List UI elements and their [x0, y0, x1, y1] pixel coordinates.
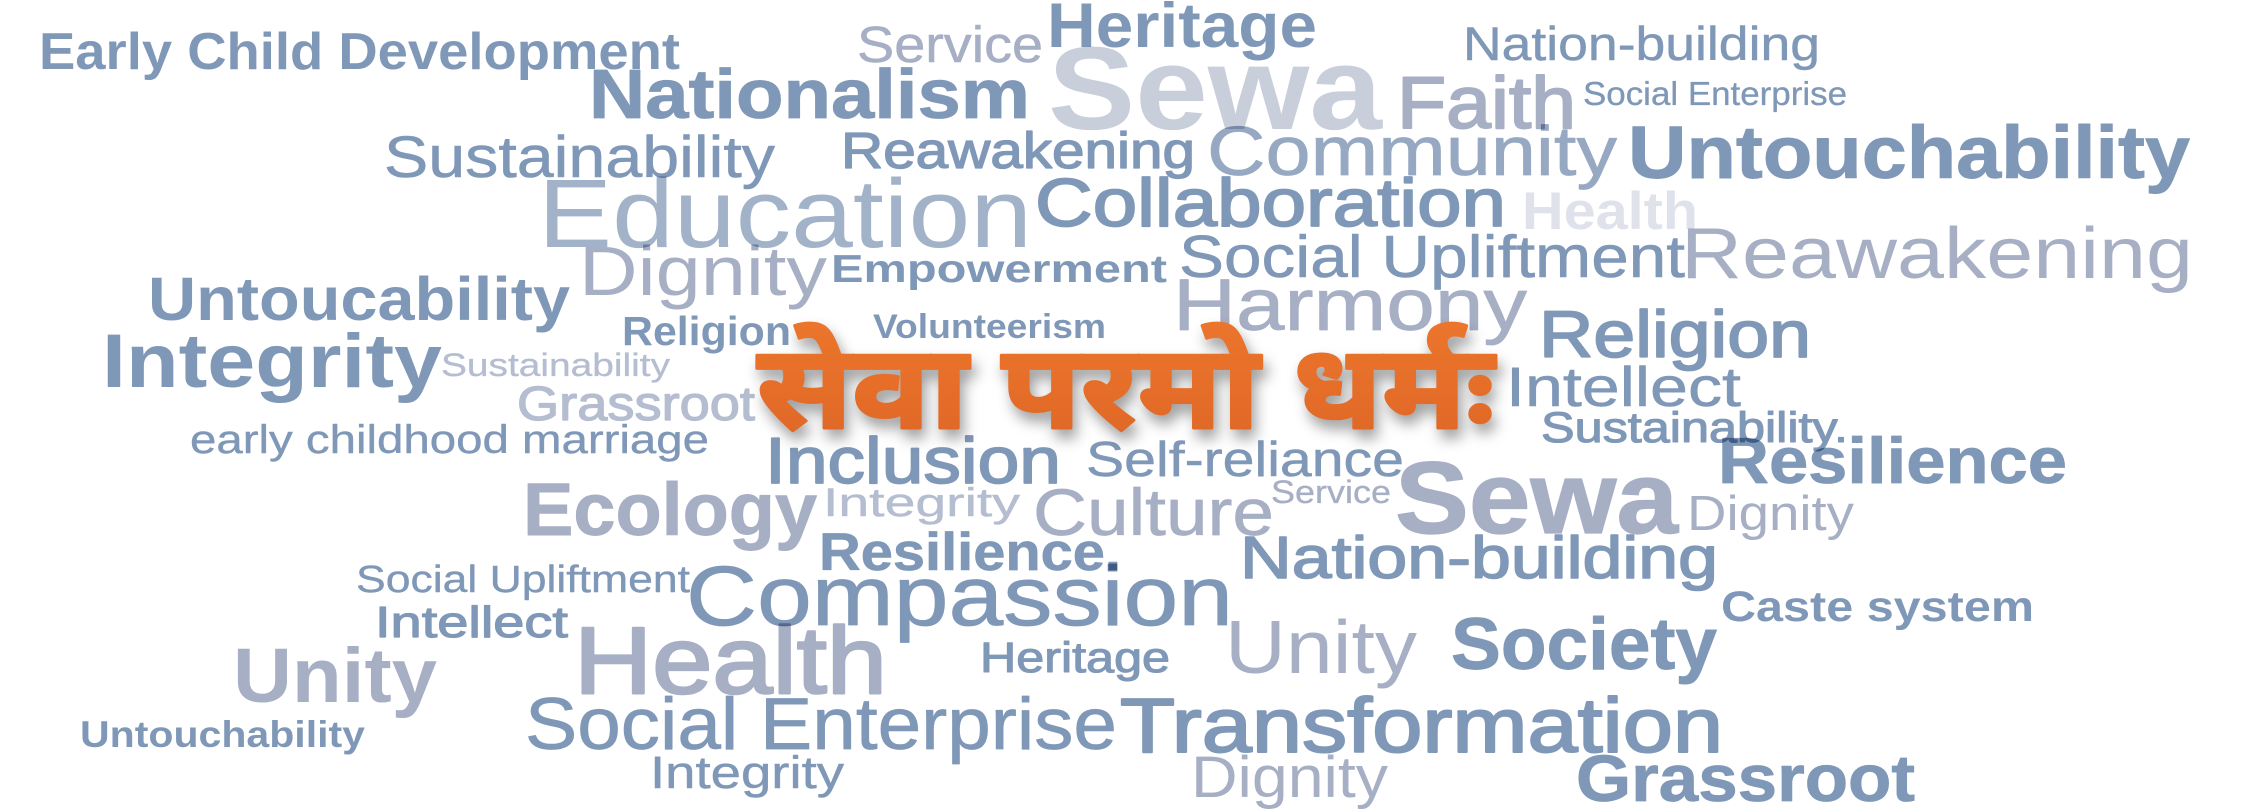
word: Sustainability small: Sustainability: [441, 347, 670, 383]
word: Harmony: Harmony: [1173, 265, 1528, 346]
word: Grassroot light: Grassroot: [517, 378, 755, 431]
word: Nationalism: Nationalism: [589, 55, 1030, 133]
title: सेवा परमो धर्मः: [757, 322, 1497, 476]
word: Health faint: Health: [1522, 182, 1698, 241]
word: Sewa large: Sewa: [1048, 23, 1384, 155]
word: Social Enterprise lower: Social Enterprise: [525, 684, 1117, 765]
word: Integrity faint: Integrity: [823, 481, 1020, 525]
word: Service small: Service: [1271, 474, 1391, 510]
word: Intellect right: Intellect: [1506, 355, 1742, 418]
word: Culture: Culture: [1033, 475, 1274, 549]
word: Intellect lower: Intellect: [375, 598, 568, 647]
word: Community: Community: [1207, 112, 1617, 190]
word: Nation-building: Nation-building: [1463, 17, 1820, 70]
word: Collaboration: Collaboration: [1035, 165, 1506, 241]
word: Early Child Development: Early Child Development: [39, 23, 680, 81]
word: Volunteerism: Volunteerism: [873, 308, 1106, 346]
word: Integrity lower: Integrity: [650, 747, 845, 798]
word: Unity left: Unity: [233, 633, 437, 719]
word: Education: Education: [538, 159, 1032, 268]
word: Caste system: Caste system: [1721, 583, 2034, 631]
word: Empowerment: Empowerment: [831, 248, 1167, 291]
word: Service: Service: [857, 16, 1043, 73]
word: Dignity: Dignity: [579, 232, 827, 310]
word: Dignity bottom: Dignity: [1191, 745, 1388, 810]
word: Sustainability right: Sustainability.: [1541, 404, 1848, 452]
word: Inclusion: Inclusion: [765, 424, 1061, 497]
word: Transformation: Transformation: [1120, 683, 1723, 769]
word: Reawakening large: Reawakening: [1681, 214, 2193, 294]
word: Health lower: Health: [574, 608, 887, 714]
word: Ecology: Ecology: [523, 468, 817, 551]
word: Untoucability: Untoucability: [148, 265, 570, 333]
word: Dignity right: Dignity: [1687, 487, 1855, 541]
word: Compassion: Compassion: [686, 549, 1233, 643]
word: Faith: Faith: [1397, 63, 1576, 144]
word: Social Upliftment lower: Social Upliftment: [356, 559, 691, 601]
word: Social Upliftment: Social Upliftment: [1179, 224, 1685, 290]
word: Untouchability lower: Untouchability: [80, 714, 365, 755]
word: Resilience.: Resilience.: [819, 523, 1121, 582]
word: Integrity: Integrity: [102, 319, 442, 404]
word: Society: Society: [1451, 604, 1717, 685]
word: Reawakening: Reawakening: [841, 122, 1195, 179]
word: Religion: Religion: [622, 308, 791, 354]
word: Nation-building lower: Nation-building: [1240, 525, 1718, 591]
word: Sustainability: Sustainability: [384, 125, 775, 190]
word: Sewa lower: Sewa: [1395, 441, 1679, 555]
word: early childhood marriage: early childhood marriage: [190, 418, 709, 462]
word: Religion right: Religion: [1539, 297, 1811, 371]
word: Social Enterprise small: Social Enterprise: [1583, 75, 1847, 112]
word: Resilience: Resilience: [1718, 424, 2067, 497]
word: Untouchability: Untouchability: [1628, 111, 2190, 194]
word: Self-reliance: Self-reliance: [1086, 433, 1404, 487]
word: Heritage lower: Heritage: [980, 634, 1170, 682]
word: Unity right: Unity: [1225, 605, 1418, 689]
